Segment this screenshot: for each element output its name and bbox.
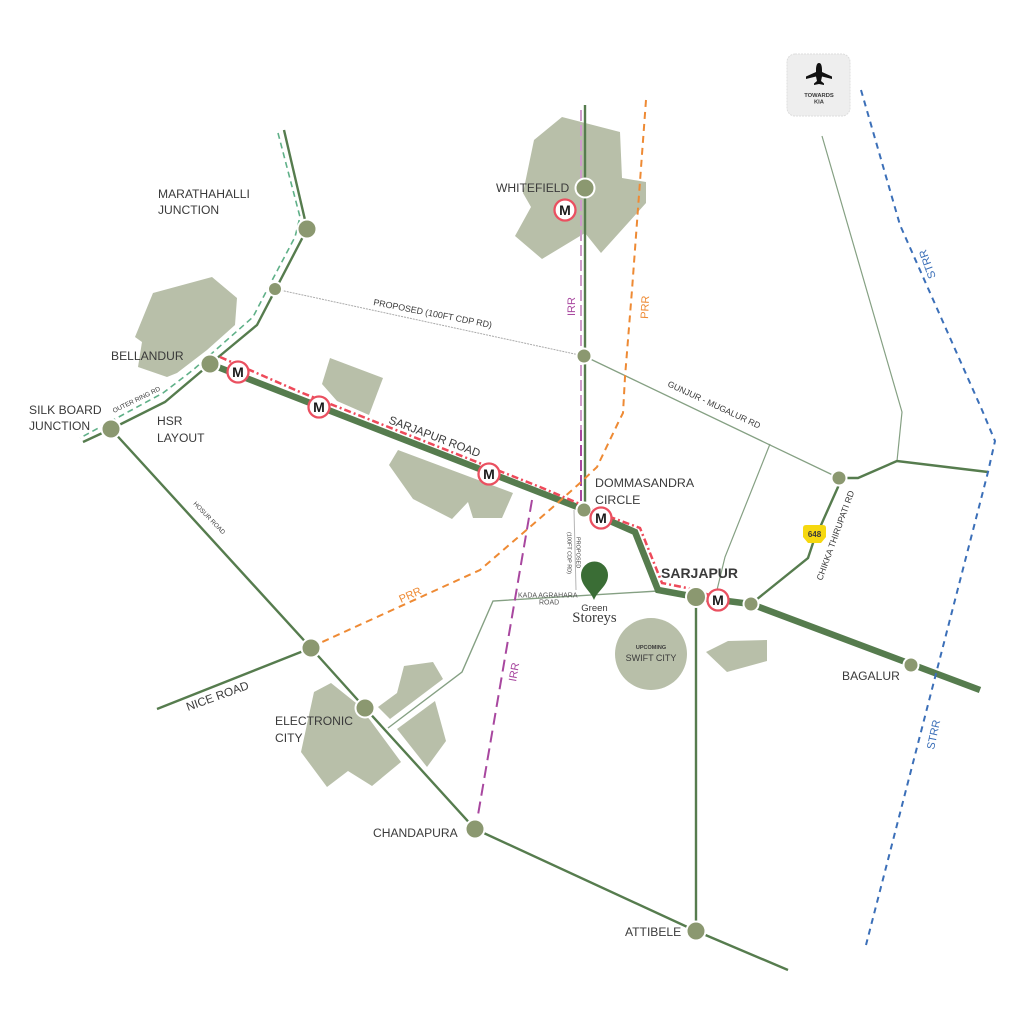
place labels: JUNCTION bbox=[158, 203, 219, 217]
green storeys pin: Green bbox=[581, 603, 608, 614]
towards KIA box bbox=[787, 54, 850, 116]
road labels: OUTER RING RD bbox=[112, 386, 162, 415]
place labels: JUNCTION bbox=[29, 419, 90, 433]
road labels: ROAD bbox=[539, 600, 559, 606]
metro icons: M bbox=[483, 466, 495, 482]
STRR bbox=[861, 90, 995, 945]
green storeys pin: Storeys bbox=[572, 610, 617, 626]
outer ring road dashed bbox=[80, 133, 300, 438]
place labels: SILK BOARD bbox=[29, 403, 102, 417]
swift city circle: UPCOMING bbox=[636, 645, 666, 651]
road labels: PROPOSED (100FT CDP RD) bbox=[373, 297, 493, 330]
place labels bbox=[29, 181, 900, 939]
road labels: PRR bbox=[639, 295, 652, 319]
thin roads bbox=[275, 136, 902, 728]
road labels: NICE ROAD bbox=[184, 678, 251, 714]
road labels: PROPOSED bbox=[574, 537, 580, 568]
IRR lower dashed line bbox=[478, 500, 532, 815]
highway shield 648: 648 bbox=[808, 530, 822, 539]
place labels: SARJAPUR bbox=[661, 565, 738, 581]
place labels: HSR bbox=[157, 414, 183, 428]
road labels: GUNJUR - MUGALUR RD bbox=[666, 379, 762, 431]
metro icons: M bbox=[595, 510, 607, 526]
place labels: MARATHAHALLI bbox=[158, 187, 250, 201]
road labels: PRR bbox=[397, 585, 423, 606]
metro line dashed bbox=[220, 357, 716, 597]
metro icons: M bbox=[559, 202, 571, 218]
metro icons: M bbox=[313, 399, 325, 415]
IRR upper dashed line bbox=[580, 110, 582, 505]
place labels: ATTIBELE bbox=[625, 925, 681, 939]
highway shield 648 bbox=[803, 525, 826, 543]
road labels: CHIKKA THIRUPATI RD bbox=[814, 489, 856, 582]
place labels: BAGALUR bbox=[842, 669, 900, 683]
road labels: (100FT CDP RD) bbox=[566, 532, 572, 574]
road labels: IRR bbox=[566, 297, 578, 316]
road labels: HOSUR ROAD bbox=[192, 501, 227, 536]
nodes bbox=[102, 178, 918, 940]
place labels: DOMMASANDRA bbox=[595, 476, 695, 490]
metro icons: M bbox=[232, 364, 244, 380]
place labels: WHITEFIELD bbox=[496, 181, 570, 195]
place labels: LAYOUT bbox=[157, 431, 205, 445]
towards KIA box: TOWARDS bbox=[804, 93, 834, 99]
road labels: KADA AGRAHARA bbox=[518, 592, 578, 600]
road labels: STRR bbox=[917, 248, 939, 280]
main roads bbox=[83, 105, 988, 970]
metro icons: M bbox=[712, 592, 724, 608]
road labels: IRR bbox=[507, 662, 522, 683]
place labels: BELLANDUR bbox=[111, 349, 184, 363]
Sarjapur road bbox=[210, 364, 980, 690]
place labels: CIRCLE bbox=[595, 493, 640, 507]
road labels bbox=[112, 248, 943, 751]
towards KIA box: KIA bbox=[814, 100, 825, 106]
green area polygons bbox=[135, 117, 767, 787]
swift city circle bbox=[615, 618, 687, 690]
place labels: CHANDAPURA bbox=[373, 826, 459, 840]
road labels: STRR bbox=[925, 719, 943, 751]
swift city circle: SWIFT CITY bbox=[626, 653, 676, 663]
green storeys pin bbox=[572, 562, 617, 626]
metro icons bbox=[228, 200, 728, 610]
place labels: CITY bbox=[275, 731, 303, 745]
place labels: ELECTRONIC bbox=[275, 714, 353, 728]
road labels: SARJAPUR ROAD bbox=[387, 415, 482, 460]
PRR bbox=[320, 100, 646, 643]
